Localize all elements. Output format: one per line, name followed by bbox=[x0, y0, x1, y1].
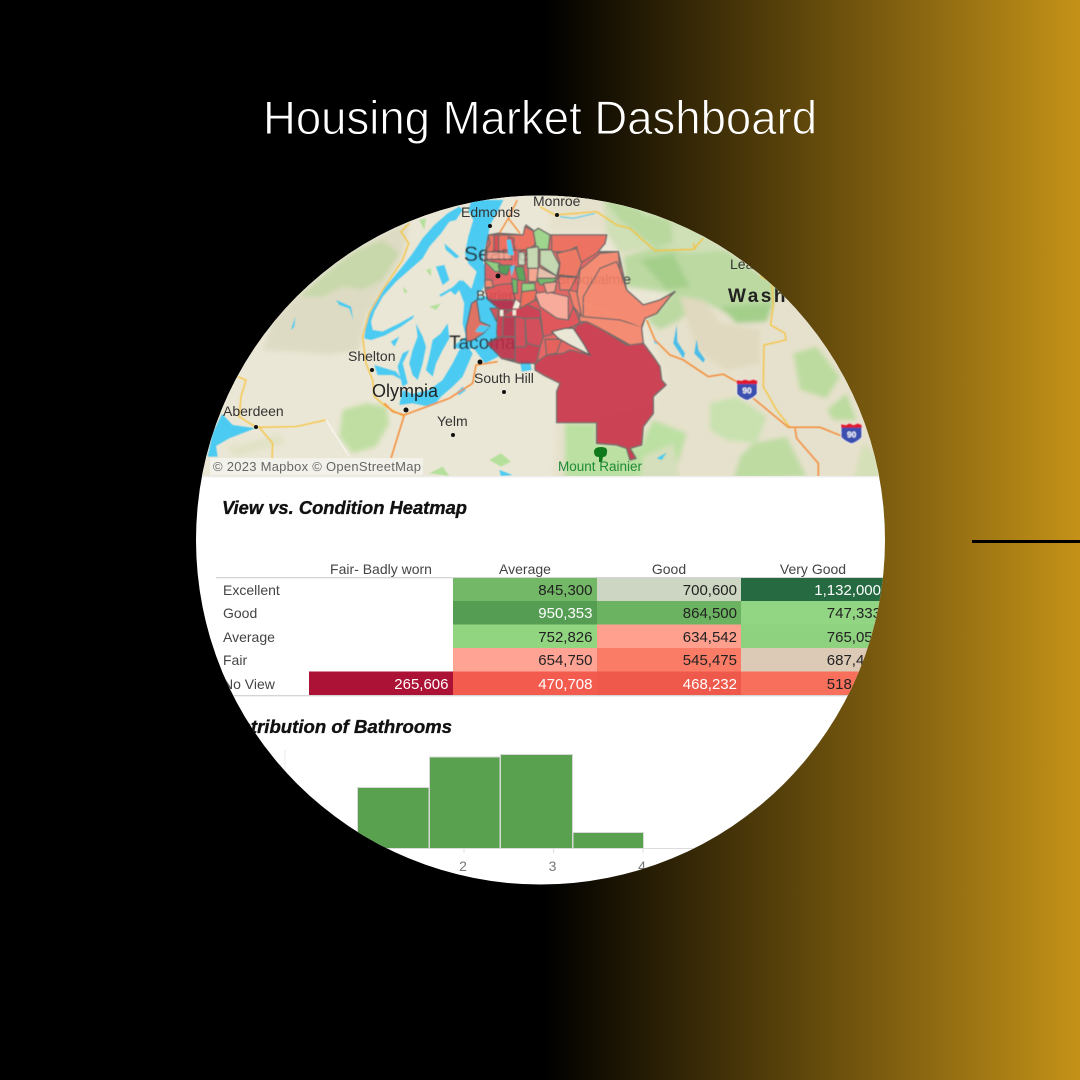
column headers: Good bbox=[652, 561, 686, 577]
heatmap values: 752,826 bbox=[538, 629, 592, 646]
histogram bars bbox=[358, 754, 644, 848]
heatmap values: 470,708 bbox=[538, 676, 592, 693]
column headers: Fair- Badly worn bbox=[330, 561, 432, 577]
heatmap cells bbox=[309, 578, 887, 695]
row labels: Average bbox=[223, 629, 275, 645]
label: large cities bbox=[372, 288, 790, 401]
label: cities bbox=[223, 196, 753, 426]
heatmap values: 747,333 bbox=[827, 605, 881, 622]
label: cities: Shelton bbox=[348, 348, 395, 364]
label: Mount Rainier: Mount Rainier bbox=[558, 459, 643, 474]
row labels: No View bbox=[223, 676, 276, 692]
heatmap values: 864,500 bbox=[683, 605, 737, 622]
heatmap values: 687,400 bbox=[827, 652, 881, 669]
heatmap values: 1,132,000 bbox=[814, 582, 881, 599]
x axis labels: 3 bbox=[549, 858, 557, 874]
icon: I-90 shield bbox=[737, 379, 757, 401]
x axis labels: 2 bbox=[459, 858, 467, 874]
choropleth regions bbox=[466, 225, 675, 460]
label: cities: Yelm bbox=[437, 413, 468, 429]
dashboard circle bbox=[190, 190, 907, 890]
heatmap values: 518,000 bbox=[827, 676, 881, 693]
heatmap values: 654,750 bbox=[538, 652, 592, 669]
label: large cities: Washington bbox=[728, 286, 861, 307]
heatmap values: 845,300 bbox=[538, 582, 592, 599]
labels beneath regions: Snoqualmie bbox=[557, 271, 631, 287]
terrain shading bbox=[226, 190, 907, 480]
heatmap values bbox=[394, 582, 881, 693]
city dots bbox=[254, 213, 559, 437]
column headers: Very Good bbox=[780, 561, 846, 577]
x axis bbox=[464, 848, 694, 853]
heatmap values: 765,050 bbox=[827, 629, 881, 646]
icon: I-90 shield east: 90 bbox=[847, 429, 857, 439]
labels beneath regions: Burien bbox=[476, 287, 516, 303]
map attribution: © 2023 Mapbox © OpenStreetMap bbox=[213, 459, 421, 474]
heatmap values: 950,353 bbox=[538, 605, 592, 622]
label: cities: Leavenworth bbox=[730, 256, 810, 272]
water and roads west bbox=[208, 207, 513, 476]
row labels bbox=[223, 582, 280, 692]
x axis labels bbox=[460, 862, 646, 871]
label: large cities: Olympia bbox=[372, 381, 439, 401]
panel: heatmap bbox=[216, 498, 887, 696]
label: cities: Edmonds bbox=[461, 204, 520, 220]
icon: I-90 shield east bbox=[841, 423, 862, 444]
heatmap values: 700,600 bbox=[683, 582, 737, 599]
icon: park tree bbox=[594, 447, 607, 462]
row labels: Excellent bbox=[223, 582, 280, 598]
column headers: Average bbox=[499, 561, 551, 577]
accent line bbox=[972, 540, 1080, 543]
row labels: Fair bbox=[223, 652, 247, 668]
panel: map bbox=[190, 190, 907, 480]
heatmap values: 468,232 bbox=[683, 676, 737, 693]
labels beneath regions: Seattle bbox=[464, 243, 529, 266]
heatmap values: 545,475 bbox=[683, 652, 737, 669]
labels beneath regions bbox=[449, 243, 631, 354]
heatmap values: 265,606 bbox=[394, 676, 448, 693]
heatmap values: 634,542 bbox=[683, 629, 737, 646]
column headers bbox=[331, 564, 846, 577]
y axis stub bbox=[284, 750, 286, 770]
panel: bathrooms histogram bbox=[249, 719, 694, 871]
heading: heatmap: View vs. Condition Heatmap bbox=[222, 498, 467, 518]
map labels bbox=[223, 196, 790, 437]
water and roads east bbox=[540, 207, 862, 477]
heading: histogram: Distribution of Bathrooms bbox=[222, 717, 452, 737]
icon: I-90 shield: 90 bbox=[742, 386, 752, 396]
row labels: Good bbox=[223, 605, 257, 621]
label: cities: Aberdeen bbox=[223, 403, 284, 419]
labels beneath regions: Tacoma bbox=[449, 333, 516, 354]
label: cities: South Hill bbox=[474, 370, 534, 386]
x axis labels: 4 bbox=[638, 858, 646, 874]
title: Housing Market Dashboard bbox=[263, 91, 817, 144]
water near Seattle bbox=[450, 200, 532, 372]
label: cities: Monroe bbox=[533, 193, 581, 209]
water gaps over choropleth bbox=[475, 239, 642, 355]
